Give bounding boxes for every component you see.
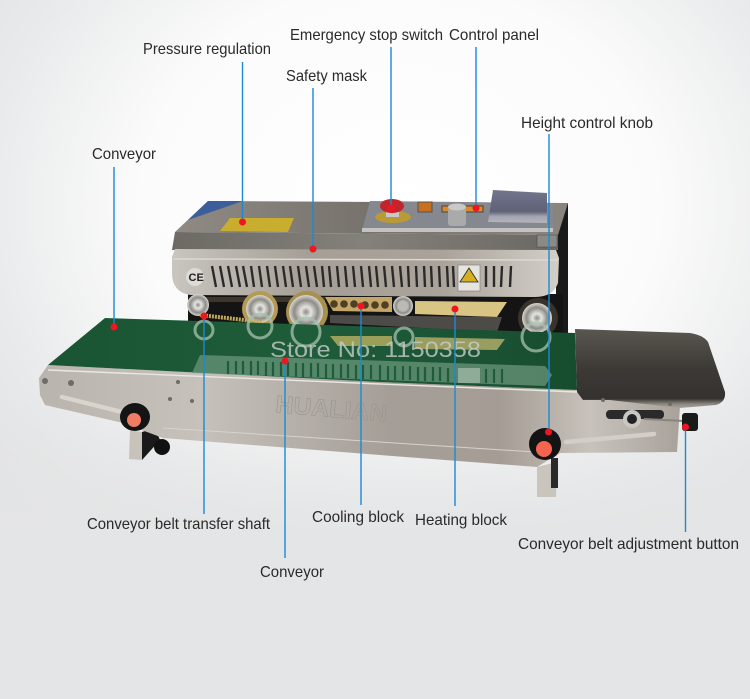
callout: emergency stop switch: Emergency stop switch [290,27,443,44]
callout: conveyor belt transfer shaft [87,312,271,533]
callout: pressure regulation [143,41,271,226]
sealing machine body [172,190,568,338]
right dark tray [575,329,725,408]
callout: height control knob [521,115,653,436]
rear knob head [120,403,150,431]
side plate rivets [42,378,672,406]
callout: control panel: Control panel [449,27,539,44]
mid band [172,232,558,250]
embossed brand text: HUALIAN [274,391,388,428]
rollers and belt [187,291,558,338]
warning label [458,265,480,291]
adjustment knob [682,413,698,431]
callout: conveyor belt adjustment button [518,424,739,553]
cooling block [325,297,392,312]
front handle rod [566,434,654,442]
conveyor assembly [39,314,725,497]
small top-right label [537,235,557,247]
callout: cooling block [312,302,405,526]
callout: conveyor bottom [260,358,325,581]
callout: conveyor bottom: Conveyor [260,564,325,581]
callout: height control knob: Height control knob [521,115,653,132]
callout: pressure regulation: Pressure regulation [143,41,271,58]
belt reflection of machine [192,314,552,386]
orange rocker switch [418,202,432,212]
metal dial [448,204,466,226]
safety mask [172,249,559,297]
yellow warning sticker [220,218,294,232]
ventilation slots [212,266,511,287]
conveyor side plate [39,365,680,467]
callout: conveyor top [92,146,157,330]
callout: conveyor belt transfer shaft: Conveyor belt transfer shaft [87,516,271,533]
callout: control panel [449,27,539,212]
callout: heating block: Heating block [415,512,508,529]
machine top plate [175,201,568,235]
rear handle rod [62,397,122,412]
callout: conveyor belt adjustment button: Conveyor belt adjustment button [518,536,739,553]
callout: emergency stop switch [290,27,443,212]
machine right column [556,203,568,333]
callout: heating block [415,306,508,529]
watermark: Store No: 1150358 [270,337,481,362]
printer cover [488,190,547,223]
callout: cooling block: Cooling block [312,509,405,526]
lower grey plate [330,315,502,332]
control panel plate [362,199,553,232]
callout: conveyor top: Conveyor [92,146,157,163]
emergency stop button [375,199,411,223]
blue sticker [188,201,243,220]
CE mark: CE [188,272,204,284]
conveyor rear knob [129,428,170,460]
heating block [415,301,507,317]
callout: safety mask [286,68,368,252]
callout: safety mask: Safety mask [286,68,368,85]
adjustment slot and ring [606,410,684,428]
machine lower black chassis [188,294,563,335]
indicator strips [442,206,483,212]
CE mark [186,268,204,286]
front knob head [529,428,561,460]
conveyor green belt [48,318,577,390]
front bracket [537,458,558,497]
